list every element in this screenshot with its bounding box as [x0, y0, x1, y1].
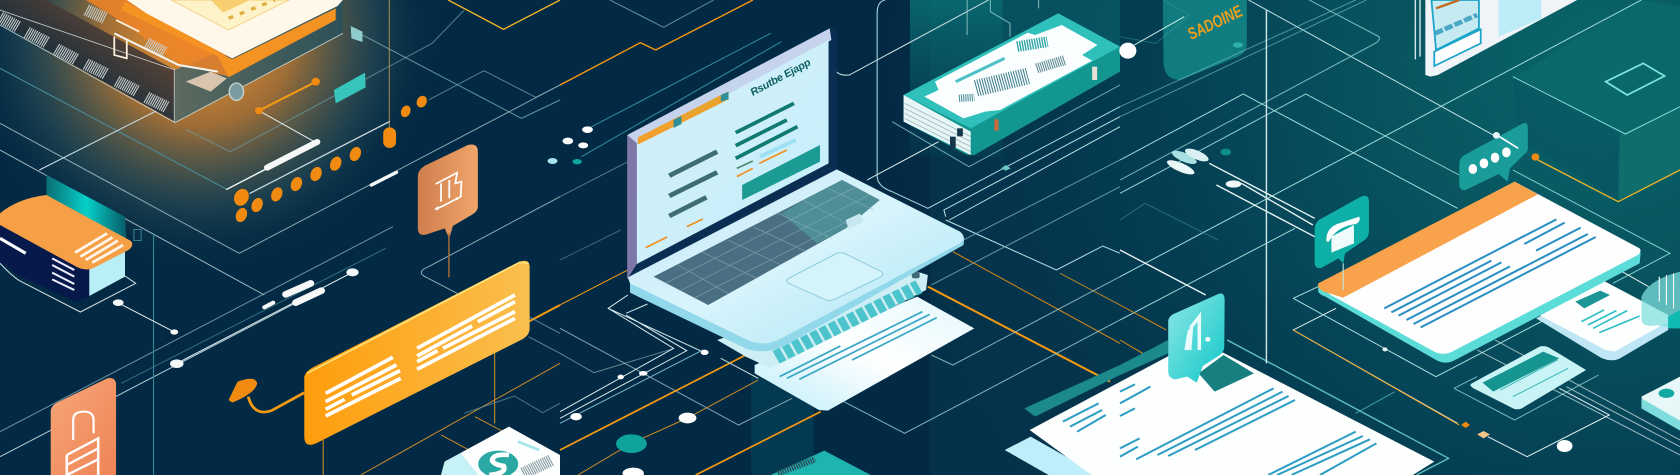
- small node cluster: [1165, 146, 1387, 351]
- laptop screen lines: [646, 103, 797, 248]
- orange message banner: [304, 261, 530, 445]
- cable and plug: [114, 33, 218, 72]
- circuit lines left: [0, 0, 560, 475]
- bottom teal card: [771, 451, 871, 475]
- laptop base: [630, 237, 964, 351]
- money document: [441, 427, 560, 475]
- lower nodes: [1461, 422, 1572, 452]
- teal ticket box: [904, 13, 1120, 155]
- top-right teal box: [1513, 0, 1680, 202]
- teal column panels: [751, 0, 1120, 475]
- chat bubble: [1459, 123, 1528, 190]
- teal chip: [334, 73, 366, 103]
- circuit lines center: [560, 0, 1120, 475]
- left region: [0, 0, 560, 475]
- document sheet top: [1415, 0, 1577, 77]
- padlock tag: [51, 378, 116, 475]
- nodes: [562, 126, 1011, 475]
- laptop screen: [637, 40, 829, 264]
- white bar connectors: [227, 122, 396, 307]
- card stack icon: [0, 175, 141, 312]
- center region: [560, 0, 1120, 475]
- laptop keyboard: [654, 180, 880, 305]
- orange dots: [232, 94, 429, 224]
- orange connector: [255, 78, 320, 114]
- laptop lid: [627, 28, 837, 279]
- main orange-header card: [1318, 182, 1641, 363]
- laptop trackpad: [787, 253, 883, 301]
- lower right card: [1641, 377, 1680, 431]
- under-card card: [1536, 280, 1668, 360]
- small phone card: [1470, 346, 1586, 409]
- glow behind server: [0, 0, 460, 280]
- orange cable connector: [229, 379, 304, 412]
- lower paper sheet: [755, 297, 974, 411]
- phone icon tag: [1315, 196, 1369, 268]
- circuit lines right: [1120, 0, 1680, 475]
- right round teal shape: [1641, 272, 1680, 328]
- orange tray: [121, 2, 336, 77]
- server barcode vents: [0, 10, 167, 107]
- right region: [1005, 0, 1680, 475]
- white tray top: [127, 0, 343, 58]
- shopping cart tag: [418, 145, 478, 277]
- white nodes: [113, 158, 557, 368]
- large document bottom: [1005, 340, 1434, 475]
- laptop: [627, 28, 964, 351]
- figure tag: [1168, 293, 1225, 383]
- saving panel with label: [1119, 0, 1247, 80]
- server box: [0, 0, 343, 123]
- striped lower tray: [717, 272, 928, 368]
- laptop screen title: Rsutbe Ejapp: [748, 57, 814, 99]
